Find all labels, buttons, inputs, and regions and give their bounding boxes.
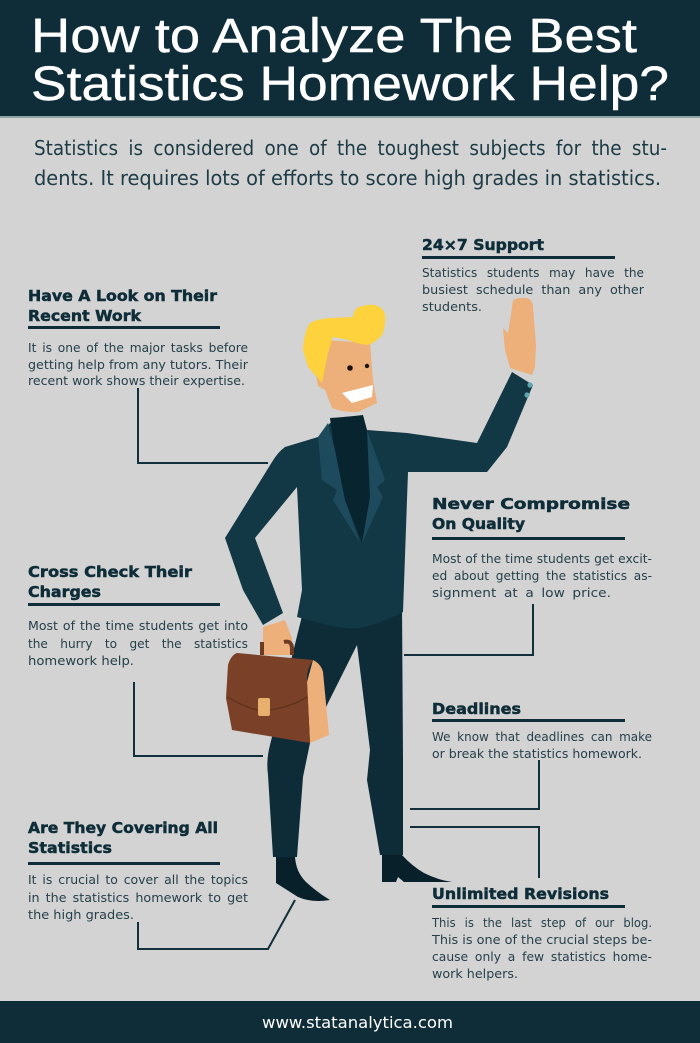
block: recent work: recent work shows their expertise. [28,374,245,389]
block: unlimited revisions: cause only a few statistics home- [432,950,652,965]
block: recent work [28,287,249,389]
block: 24x7 support: Statistics students may have the [422,266,644,281]
block: recent work: getting help from any tutors. Their [28,358,249,373]
block: cross check: the hurry to get the statistics [28,637,248,652]
turtleneck [330,415,370,543]
block: never compromise: ed about getting the statistics as- [432,569,652,584]
intro text [34,136,667,190]
cuff buttons [524,382,533,398]
shoes [276,855,452,901]
hair [303,305,385,383]
title: Statistics Homework Help? [31,58,669,111]
block: covering all statistics: Statistics [28,839,112,857]
block: deadlines: Deadlines [432,700,521,718]
block: unlimited revisions: work helpers. [432,967,518,982]
jacket [225,372,533,628]
hand holding bag [263,620,292,655]
briefcase [226,642,329,743]
block: never compromise: On Quality [432,515,525,533]
block: recent work: Recent Work [28,307,142,325]
block: covering all statistics: It is crucial to cover all the topics [28,873,248,888]
block: deadlines: or break the statistics homework. [432,747,642,762]
block: 24x7 support: busiest schedule than any other [422,283,645,298]
block: never compromise: Never Compromise [432,495,630,513]
block: cross check: homework help. [28,654,134,669]
block: 24x7 support: 24×7 Support [422,236,544,254]
block: covering all statistics: Are They Covering All [28,819,218,837]
block: recent work: Have A Look on Their [28,287,218,305]
block: never compromise: Most of the time students get excit- [432,552,652,567]
block: covering all statistics: the high grades. [28,908,134,923]
intro text: dents. It requires lots of efforts to score high grades in statistics. [34,166,661,190]
block: covering all statistics [28,819,248,923]
head [314,340,377,412]
block: cross check: Most of the time students get into [28,619,248,634]
connector: recent work [138,388,268,463]
title [31,10,669,111]
block: never compromise: signment at a low price. [432,586,611,601]
block: deadlines [432,700,652,762]
block: deadlines: We know that deadlines can make [432,730,652,745]
block: 24x7 support [422,236,645,315]
connector: cross check [134,682,263,756]
block: recent work: It is one of the major tasks before [28,341,248,356]
block: cross check: Charges [28,583,101,601]
website url: www.statanalytica.com [262,1013,453,1032]
footer banner [0,1001,700,1043]
block: unlimited revisions: Unlimited Revisions [432,885,609,903]
block: cross check [28,563,248,669]
lapels [318,423,385,543]
eyes [347,364,369,371]
block: never compromise [432,495,652,601]
smile [342,385,373,403]
connector: unlimited revisions [410,827,539,878]
block: cross check: Cross Check Their [28,563,193,581]
block: unlimited revisions: This is one of the crucial steps be- [431,933,652,948]
block: unlimited revisions [431,885,652,982]
illustration: businessman with briefcase [225,298,536,901]
title: How to Analyze The Best [31,10,637,63]
connector: never compromise [404,604,533,655]
connector: covering all statistics [138,900,295,949]
block: covering all statistics: in the statistics homework to get [28,891,248,906]
trousers [267,605,403,857]
header banner [0,0,700,118]
raised hand [503,298,536,375]
block: unlimited revisions: This is the last step of our blog. [431,916,652,931]
connector: deadlines [410,760,539,809]
block: 24x7 support: students. [422,300,482,315]
